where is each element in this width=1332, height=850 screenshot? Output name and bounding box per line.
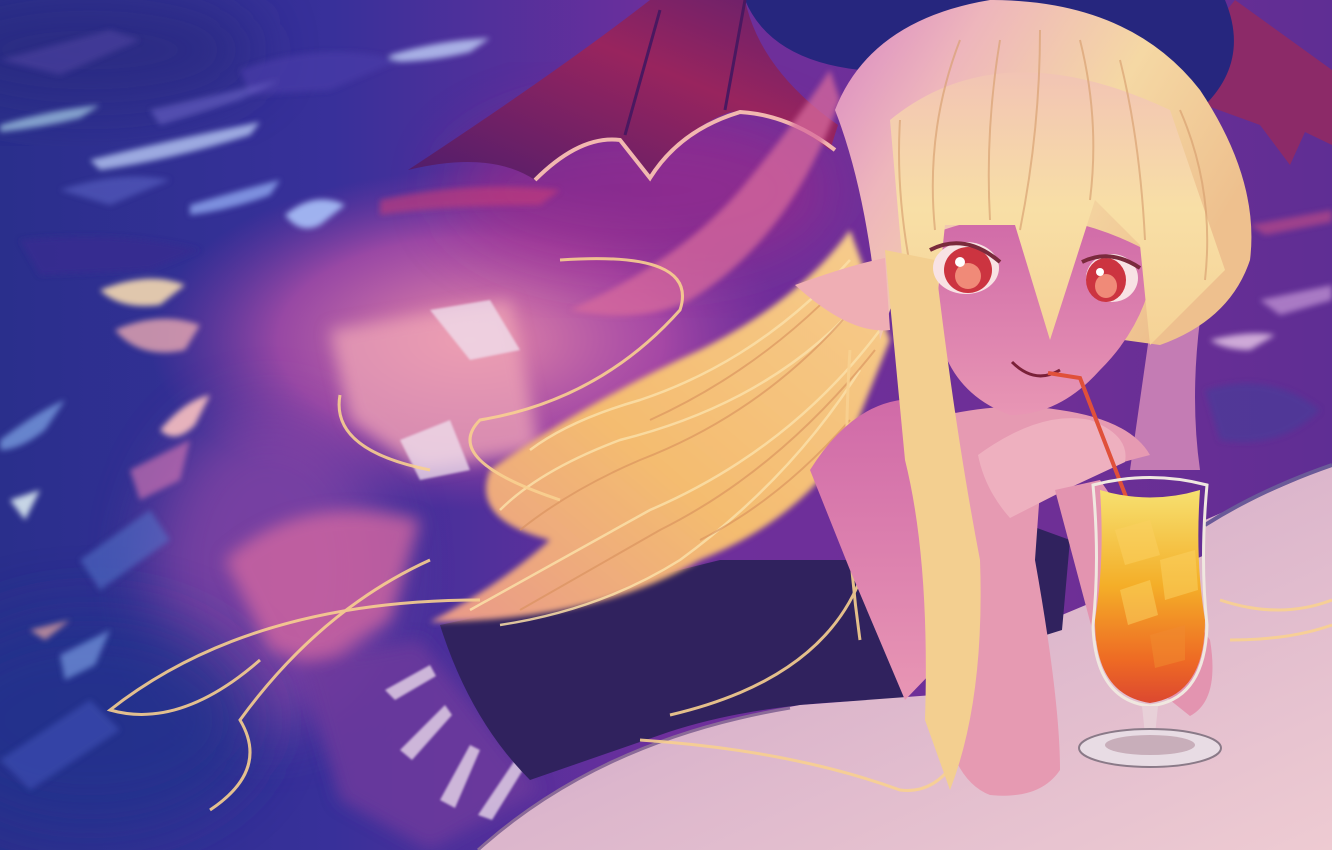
shoulder and body: [810, 399, 1040, 700]
long front hair lock: [885, 250, 981, 790]
ice cubes: [1115, 520, 1198, 668]
face: [930, 217, 1155, 415]
front bangs: [890, 72, 1225, 345]
eye left: [930, 242, 1000, 294]
eye right: [1082, 254, 1140, 302]
pointed ear: [795, 258, 890, 330]
hair strands shading: [899, 30, 1207, 290]
mouth: [1012, 362, 1060, 376]
hand: [978, 418, 1126, 518]
swimsuit: [440, 560, 905, 780]
flowing hair: [110, 70, 1332, 810]
right wing: [1195, 0, 1332, 165]
head hair mass: [835, 0, 1251, 345]
back hair strand right: [1130, 320, 1200, 470]
submerged legs and frills: [225, 300, 540, 850]
frill highlights: [385, 300, 526, 820]
cocktail glass: [1079, 478, 1221, 767]
left wing: [408, 0, 838, 180]
straw: [1048, 373, 1128, 502]
forearm: [922, 407, 1150, 796]
hair bow: [745, 0, 1234, 105]
pool float / deck: [478, 465, 1332, 850]
other arm: [1055, 480, 1212, 716]
suit strap: [1015, 520, 1070, 640]
